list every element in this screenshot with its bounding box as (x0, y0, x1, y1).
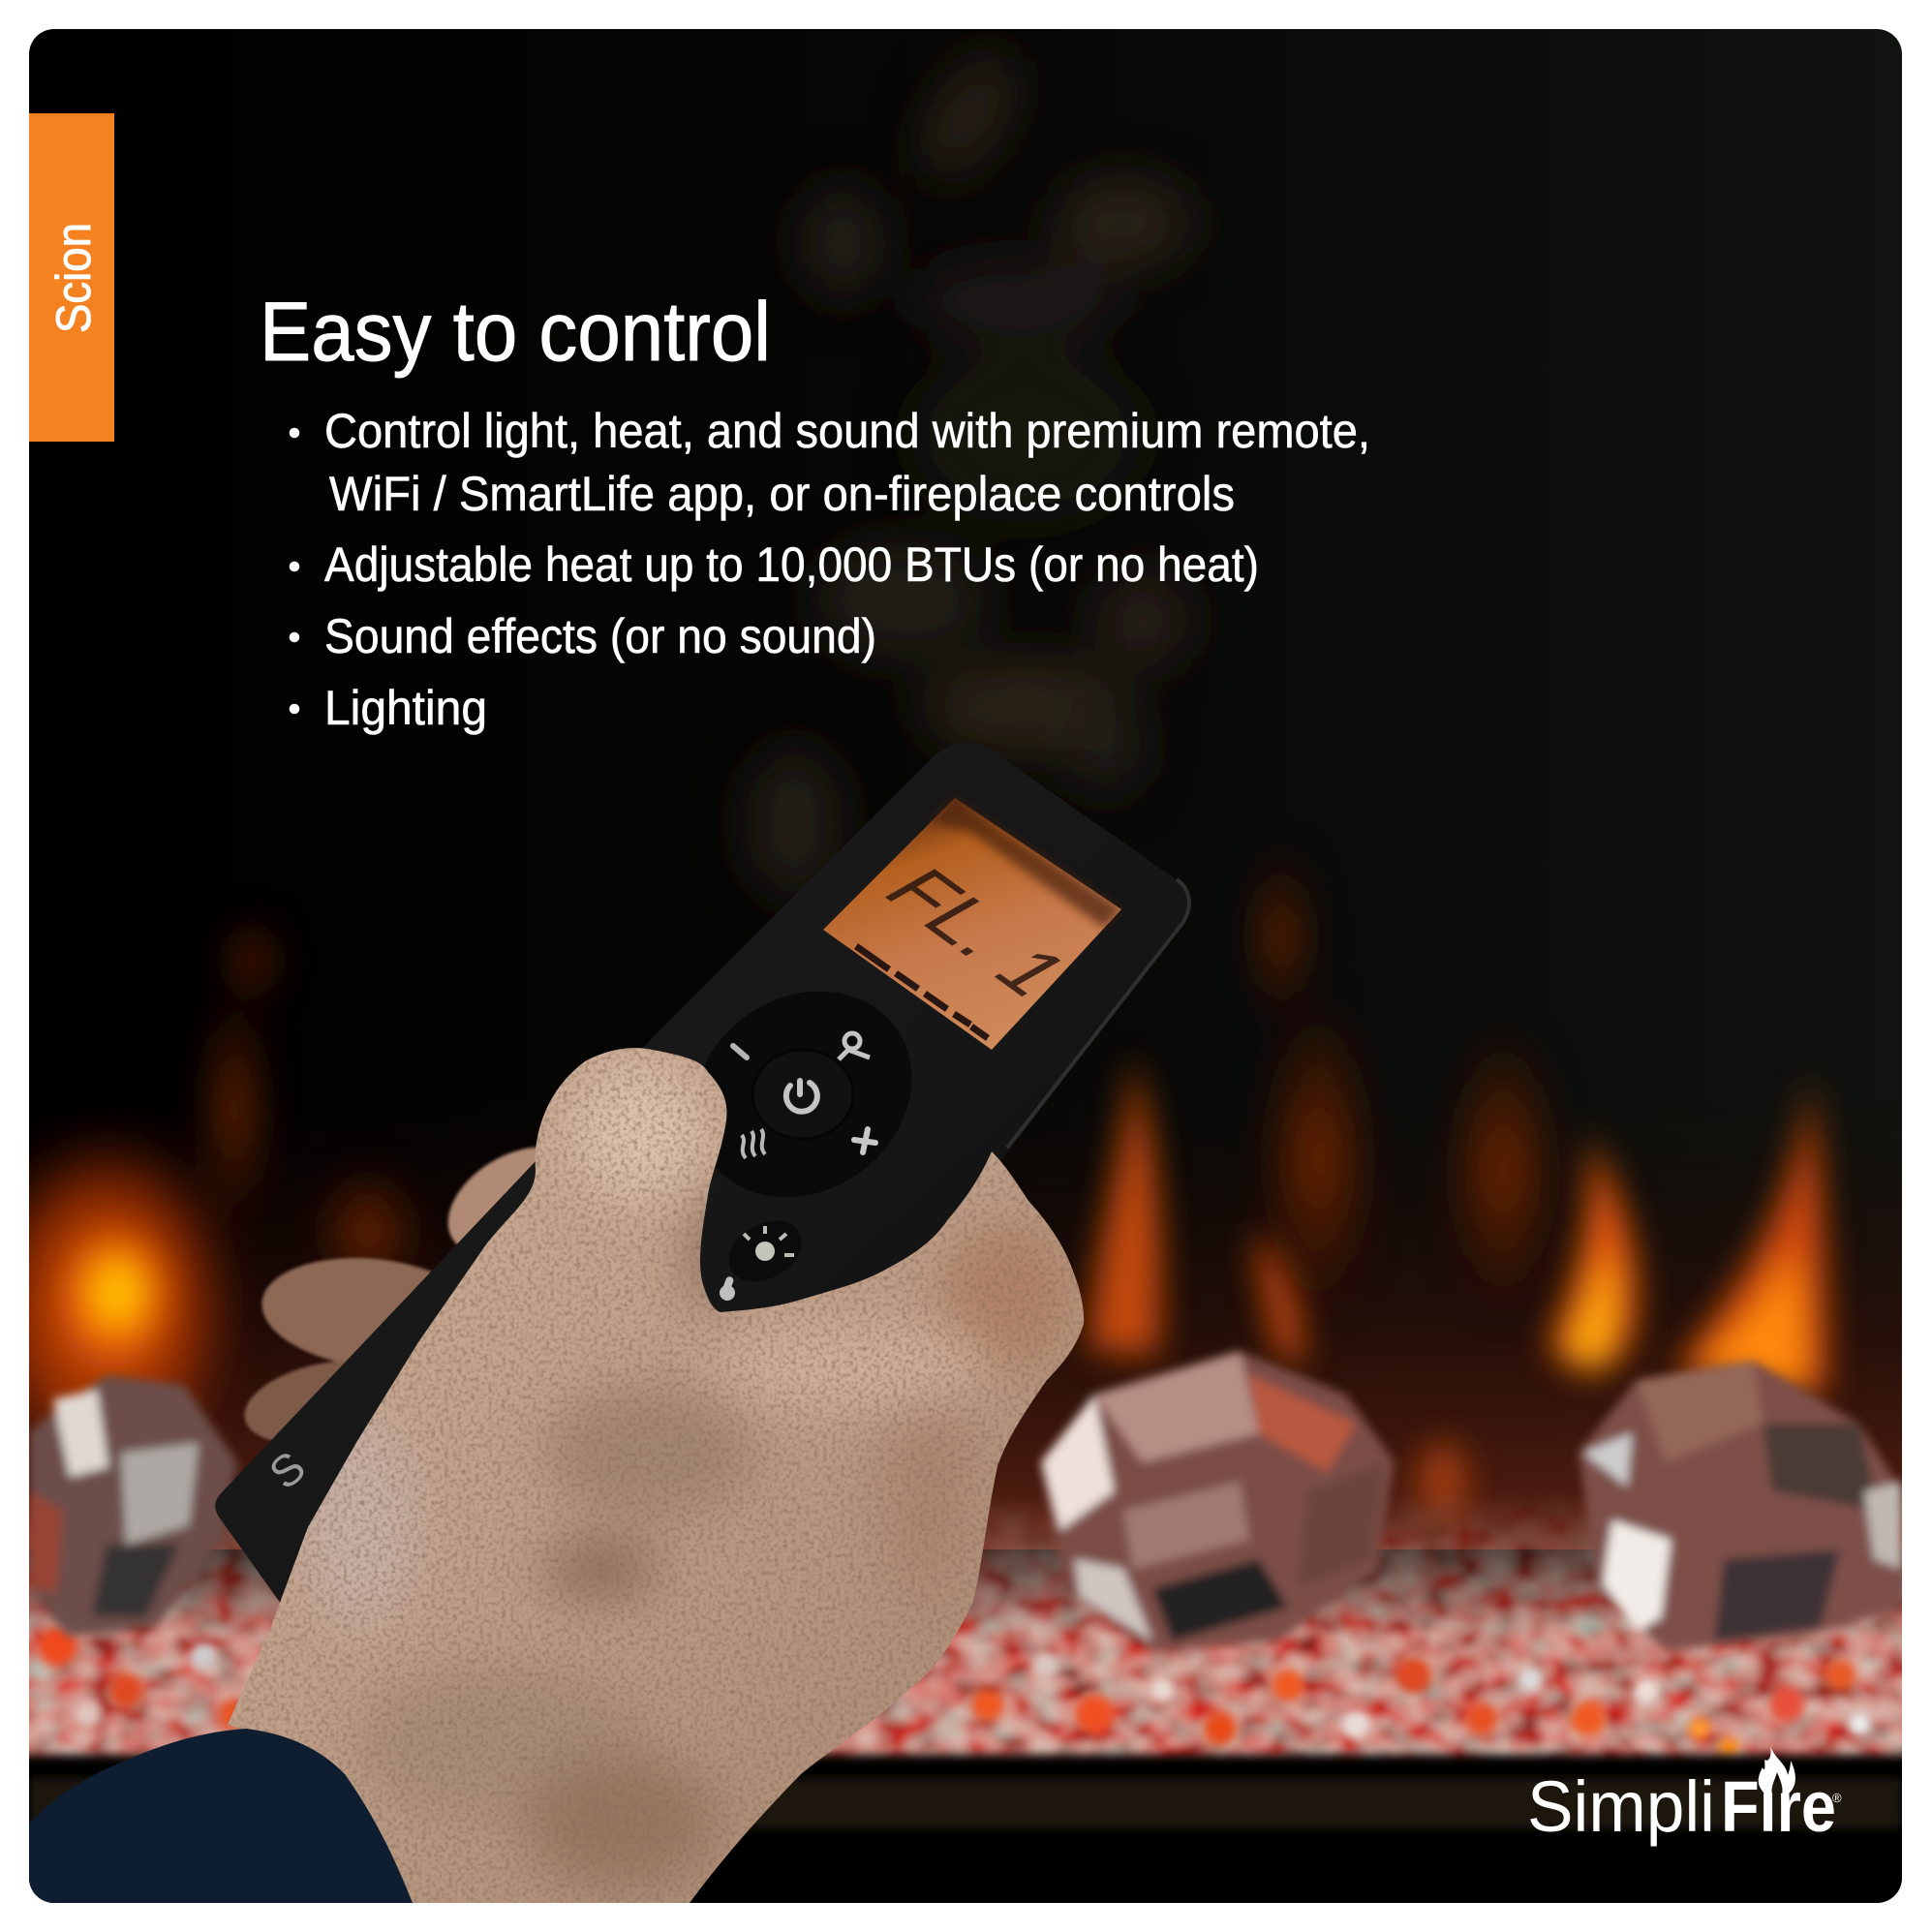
remote logo fragment: S (260, 1441, 315, 1499)
hand (223, 1046, 1094, 1908)
LCD screen (823, 798, 1121, 1050)
bullet 4: Lighting (324, 681, 487, 735)
skin shading and texture (223, 1046, 1094, 1908)
sleeve (29, 1729, 413, 1903)
bullet 1: Control light, heat, and sound with premium remote, (324, 404, 1370, 458)
bullet 1 (290, 404, 1370, 521)
SimpliFire logo: Simpli (1527, 1766, 1715, 1847)
icon: flame (1759, 1746, 1795, 1794)
crystal: right (1579, 1361, 1902, 1651)
remote control (215, 743, 1189, 1617)
fireplace base strip (19, 1755, 1912, 1915)
crystal: centre (1041, 1351, 1395, 1651)
icon: power (786, 1081, 817, 1112)
icon: heat waves (742, 1129, 765, 1158)
heading: Easy to control (260, 286, 771, 379)
bullet 3: Sound effects (or no sound) (324, 609, 876, 663)
blurred smoke pattern on firebox wall (746, 41, 1191, 901)
icon: light (839, 1033, 870, 1059)
bullet 2: Adjustable heat up to 10,000 BTUs (or no heat) (324, 537, 1259, 592)
SimpliFire logo: ® (1832, 1791, 1842, 1805)
SimpliFire logo (1527, 1746, 1842, 1847)
dim background flames (29, 864, 1565, 1439)
remote body (215, 743, 1188, 1617)
LCD level bars (856, 946, 988, 1038)
icon: plus (854, 1129, 875, 1152)
back fingers (242, 1145, 537, 1441)
control dial (654, 949, 952, 1240)
fire glow band (29, 1177, 1902, 1549)
bright flames (59, 1056, 1827, 1520)
orange tab: product name (29, 113, 114, 442)
bullet 1: WiFi / SmartLife app, or on-fireplace controls (329, 467, 1235, 521)
remote bezel highlight (1007, 879, 1189, 1148)
icon: minus (733, 1046, 747, 1058)
SimpliFire logo: Fire (1721, 1766, 1836, 1847)
glass ember bed (29, 1501, 1902, 1763)
hand silhouette with skin tone (228, 1048, 1084, 1903)
lower buttons (718, 1209, 813, 1301)
crystal: left (29, 1375, 237, 1637)
flames (0, 849, 1827, 1520)
LCD readout: FL. 1 (871, 850, 1083, 1012)
orange tab: product name: Scion (46, 223, 101, 333)
feature bullet list (290, 404, 1370, 735)
